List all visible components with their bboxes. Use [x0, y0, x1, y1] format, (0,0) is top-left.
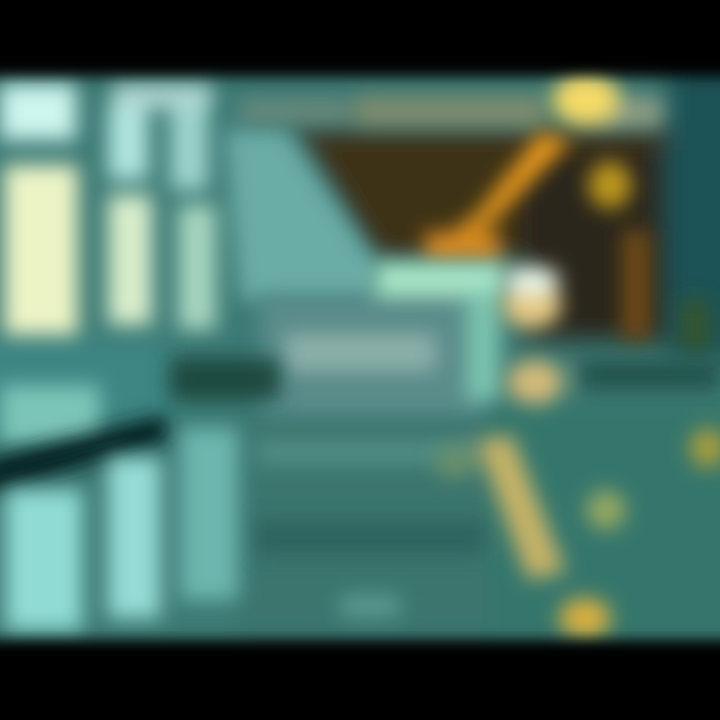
top letterbox bar	[0, 0, 720, 73]
bottom letterbox bar	[0, 642, 720, 720]
left windows	[0, 84, 375, 445]
orange light beam	[425, 132, 572, 260]
yellow lamps	[552, 74, 710, 350]
floor window reflections	[6, 428, 400, 630]
warm floor reflections	[435, 266, 720, 638]
central desk	[255, 262, 503, 555]
ceiling strip	[240, 96, 662, 126]
dark rail	[0, 358, 280, 495]
